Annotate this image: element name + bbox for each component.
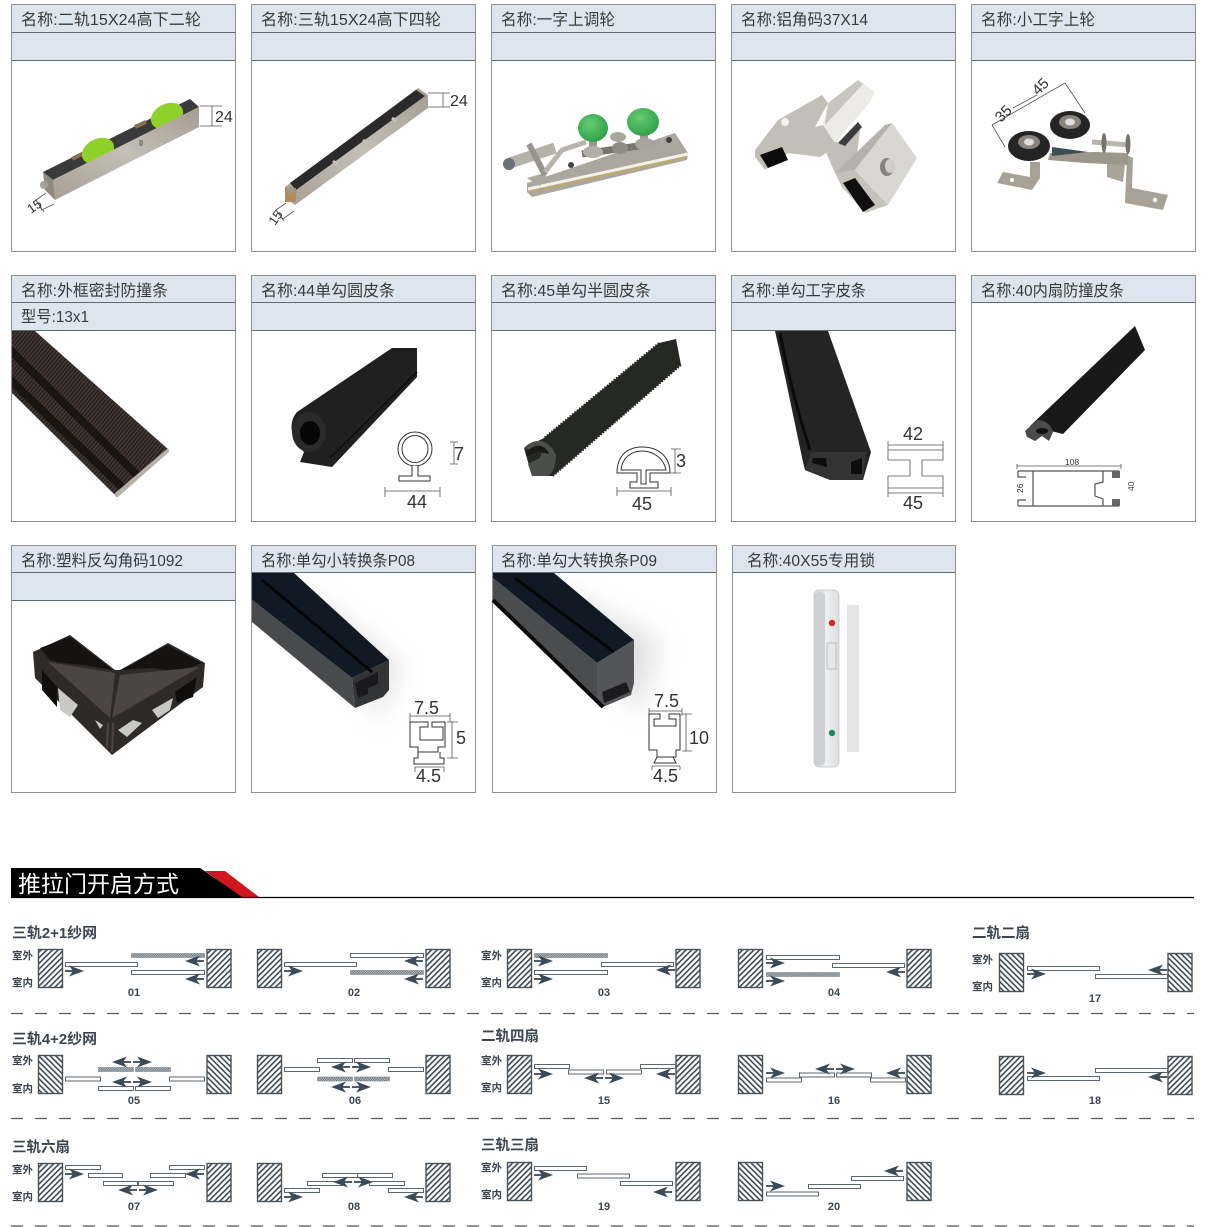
product: lock	[814, 590, 859, 767]
product: I-section strip	[775, 331, 871, 480]
heading: 名称:单勾大转换条P09	[501, 552, 657, 570]
cross-section 7.5 / 10 / 4.5: 7.5	[654, 691, 679, 711]
panel: 二轨15X24高下二轮	[12, 4, 236, 252]
heading: 名称:小工字上轮	[981, 11, 1095, 29]
cross-section 7.5 / 10 / 4.5: 10	[689, 728, 709, 748]
product: sealing strip	[0, 331, 169, 497]
dimension 35-45: 35	[992, 102, 1016, 126]
cross-section 44 x 7: 44	[407, 492, 427, 512]
panel: 小工字上轮	[972, 4, 1196, 252]
door diagram 08: 08	[348, 1201, 360, 1213]
door diagram 01: 室外	[12, 949, 33, 962]
door diagram 04: 04	[828, 987, 841, 999]
cross-section 7.5 / 5 / 4.5: 7.5	[414, 698, 439, 718]
frame cross-section: 108	[1065, 457, 1079, 467]
door diagram 03: 室内	[481, 976, 502, 989]
dimension 15: 15	[24, 196, 45, 216]
door diagram 03	[481, 949, 700, 999]
door diagram 05: 室外	[12, 1054, 33, 1067]
dimension 24	[200, 106, 233, 126]
product: aluminium corner bracket	[755, 80, 917, 213]
cross-section 7.5 / 10 / 4.5: 4.5	[653, 766, 678, 786]
door diagram 07: 室内	[12, 1190, 33, 1203]
door diagram 18	[1000, 1056, 1192, 1107]
dimension 35-45: 45	[1029, 75, 1053, 99]
door diagram 07: 室外	[12, 1163, 33, 1176]
heading: 名称:45单勾半圆皮条	[501, 282, 651, 300]
group title: 三轨六扇: 三轨六扇	[12, 1138, 70, 1156]
frame cross-section: 40	[1126, 481, 1136, 491]
door diagram 18: 18	[1089, 1095, 1101, 1107]
product: round rubber strip	[292, 348, 417, 467]
panel: 40X55专用锁	[732, 546, 956, 792]
cross-section 7.5 / 5 / 4.5: 4.5	[416, 766, 441, 786]
door diagram 02	[258, 950, 450, 999]
cross-section 44 x 7	[385, 432, 464, 512]
door diagram 07: 07	[128, 1201, 140, 1213]
heading: 名称:铝角码37X14	[741, 11, 868, 29]
door diagram 16: 16	[828, 1095, 840, 1107]
door diagram 06	[258, 1056, 450, 1107]
door diagram 19	[481, 1161, 700, 1213]
door diagram 19: 19	[598, 1201, 610, 1213]
door diagram 05: 05	[128, 1095, 140, 1107]
cross-section 7.5 / 5 / 4.5	[410, 698, 466, 786]
panel: 铝角码37X14	[732, 4, 956, 252]
section heading band: 推拉门开启方式	[18, 871, 179, 897]
dashed divider	[11, 1118, 1194, 1120]
heading: 名称:三轨15X24高下四轮	[261, 11, 441, 29]
door diagram 16	[738, 1056, 931, 1107]
door diagram 17	[972, 953, 1192, 1005]
dimension 24: 24	[450, 93, 468, 110]
cross-section 44 x 7: 7	[454, 444, 464, 464]
door diagram 17: 室内	[972, 980, 993, 993]
frame cross-section: 26	[1015, 483, 1025, 493]
door diagram 19: 室内	[481, 1188, 502, 1201]
cross-section 45 x 3: 3	[676, 451, 686, 471]
product: adjustable top roller	[503, 108, 688, 197]
panel: 塑料反勾角码1092	[12, 546, 236, 792]
door diagram 03: 03	[598, 987, 610, 999]
heading: 名称:40内扇防撞皮条	[981, 282, 1124, 300]
door diagram 15: 室内	[481, 1081, 502, 1094]
dimension 35-45	[992, 75, 1085, 147]
door diagram 15: 15	[598, 1095, 610, 1107]
cross-section 7.5 / 5 / 4.5: 5	[456, 728, 466, 748]
door diagram 01: 室内	[12, 976, 33, 989]
panel: 40内扇防撞皮条	[972, 276, 1196, 522]
panel: 单勾大转换条P09	[492, 546, 716, 792]
product: small top roller	[997, 111, 1168, 210]
panel: 单勾工字皮条	[732, 276, 956, 522]
product: large conversion strip	[493, 573, 660, 715]
model number: 型号:13x1	[21, 308, 89, 326]
heading: 名称:40X55专用锁	[747, 552, 875, 570]
heading: 名称:一字上调轮	[501, 11, 615, 29]
door diagram 05	[12, 1054, 231, 1107]
dimension 24	[428, 93, 468, 110]
door diagram 03: 室外	[481, 949, 502, 962]
product: roller rail	[40, 98, 199, 200]
cross-section 42 / 45: 42	[903, 424, 923, 444]
group title: 三轨三扇: 三轨三扇	[481, 1136, 539, 1154]
door diagram 01	[12, 949, 231, 999]
product: four-wheel rail	[285, 88, 428, 205]
door diagram 17: 17	[1089, 993, 1101, 1005]
dimension 24: 24	[215, 109, 233, 126]
door diagram 06: 06	[349, 1095, 361, 1107]
heading: 名称:外框密封防撞条	[21, 282, 168, 300]
door diagram 04	[738, 950, 931, 999]
door diagram 17: 室外	[972, 953, 993, 966]
group title: 二轨四扇: 二轨四扇	[481, 1027, 539, 1045]
heading: 名称:单勾小转换条P08	[261, 552, 415, 570]
panel: 外框密封防撞条	[0, 276, 236, 522]
heading: 名称:44单勾圆皮条	[261, 282, 395, 300]
panel: 单勾小转换条P08	[252, 546, 476, 792]
door diagram 20	[738, 1162, 931, 1213]
group title: 三轨4+2纱网: 三轨4+2纱网	[12, 1030, 97, 1048]
door diagram 02: 02	[348, 987, 360, 999]
door diagram 15	[481, 1054, 700, 1107]
group title: 二轨二扇: 二轨二扇	[972, 924, 1030, 942]
dimension 15	[24, 193, 54, 216]
heading: 名称:单勾工字皮条	[741, 282, 866, 300]
dimension 15: 15	[265, 207, 286, 228]
door diagram 19: 室外	[481, 1161, 502, 1174]
product: half-round strip	[524, 339, 681, 476]
cross-section 42 / 45: 45	[903, 493, 923, 513]
door diagram 05: 室内	[12, 1082, 33, 1095]
section heading band	[11, 868, 1194, 898]
dimension 15	[265, 203, 294, 228]
door diagram 07	[12, 1163, 231, 1213]
door diagram 01: 01	[128, 987, 140, 999]
panel: 44单勾圆皮条	[252, 276, 476, 522]
dashed divider	[11, 1225, 1194, 1227]
cross-section 45 x 3	[617, 447, 686, 514]
frame cross-section	[1015, 457, 1136, 506]
door diagram 20: 20	[828, 1201, 840, 1213]
cross-section 42 / 45	[888, 424, 943, 513]
product: inner sash strip	[1025, 326, 1145, 441]
group title: 三轨2+1纱网: 三轨2+1纱网	[12, 924, 97, 942]
panel: 三轨15X24高下四轮	[252, 4, 476, 252]
cross-section 45 x 3: 45	[632, 494, 652, 514]
panel: 45单勾半圆皮条	[492, 276, 716, 522]
product: plastic corner key	[33, 635, 205, 755]
product: small conversion strip	[252, 573, 400, 720]
dashed divider	[11, 1012, 1194, 1014]
door diagram 15: 室外	[481, 1054, 502, 1067]
heading: 名称:二轨15X24高下二轮	[21, 11, 201, 29]
panel: 一字上调轮	[492, 4, 716, 252]
heading: 名称:塑料反勾角码1092	[21, 552, 183, 570]
door diagram 08	[258, 1164, 450, 1213]
cross-section 7.5 / 10 / 4.5	[649, 691, 709, 786]
